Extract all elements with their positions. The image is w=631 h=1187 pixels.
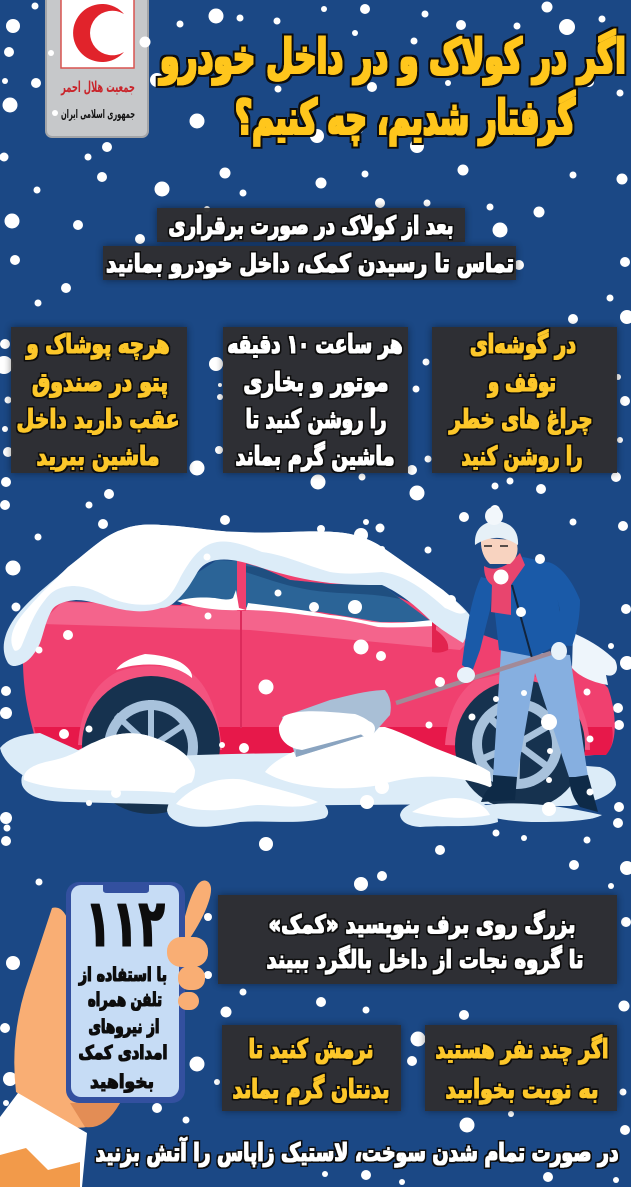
snow on window sill	[177, 590, 434, 627]
foreground snow over illustration	[36, 546, 594, 816]
panel: stay warm by stretching: بدنتان گرم بماند	[232, 1074, 390, 1105]
shirt cuff	[0, 1093, 87, 1187]
boots	[481, 775, 517, 802]
logo: Red Crescent	[46, 0, 150, 137]
logo text: red: جمعیت هلال احمر	[60, 78, 135, 96]
phone instructions: تلفن همراه	[88, 989, 162, 1011]
icon: red crescent	[73, 4, 124, 62]
rear wheel arch	[445, 670, 590, 750]
panel: blankets: پتو در صندوق	[32, 368, 168, 398]
hat	[475, 521, 518, 545]
person shoveling	[462, 507, 598, 812]
intro text block	[103, 208, 516, 280]
shovel	[279, 653, 551, 757]
panel: engine every ten minutes: هر ساعت ۱۰ دقیقه	[228, 330, 402, 360]
panel: hazard lights	[432, 327, 617, 473]
phone in hand illustration	[0, 881, 211, 1187]
panel: blankets: عقب دارید داخل	[16, 405, 180, 435]
panel: write help on snow	[218, 895, 617, 984]
door handle and mirror	[432, 622, 448, 653]
shirt sleeve	[0, 1148, 80, 1187]
phone instructions: با استفاده از	[78, 964, 167, 986]
logo text: black: جمهوری اسلامی ایران	[61, 107, 135, 122]
phone instructions: امدادی کمک	[78, 1042, 168, 1064]
rear wheel	[455, 680, 585, 810]
gloves	[457, 642, 567, 683]
panel: hazard lights: توقف و	[487, 368, 556, 398]
panel: engine every ten minutes: را روشن کنید تا	[246, 405, 386, 435]
upper finger	[184, 881, 211, 945]
panel: engine every ten minutes: موتور و بخاری	[244, 368, 388, 398]
jacket	[491, 557, 565, 657]
snow on roof	[4, 525, 471, 666]
panel: engine every ten minutes: ماشین گرم بماند	[236, 441, 394, 472]
panel: blankets: هرچه پوشاک و	[25, 330, 169, 360]
panel: stay warm by stretching: نرمش کنید تا	[248, 1035, 374, 1065]
phone	[66, 882, 185, 1103]
panel: engine every ten minutes	[223, 327, 408, 473]
emergency number: ۱۱۲	[85, 885, 165, 962]
scarf	[484, 553, 525, 615]
rear bumper snow	[572, 633, 617, 685]
face	[481, 538, 518, 564]
ground snow	[0, 733, 616, 806]
snow on wheel arch	[116, 654, 192, 678]
title	[159, 29, 626, 146]
fingers	[167, 937, 208, 1010]
snow mounds	[21, 733, 199, 805]
illustration: snow-covered car	[0, 507, 617, 827]
panel: blankets: ماشین ببرید	[36, 442, 160, 472]
panel: sleep in turns	[425, 1025, 617, 1111]
phone instructions: از نیروهای	[88, 1016, 160, 1038]
panel: hazard lights: در گوشه‌ای	[470, 329, 576, 360]
panel: blankets	[11, 327, 187, 473]
panel: hazard lights: را روشن کنید	[462, 442, 582, 472]
jeans	[493, 650, 588, 777]
front wheel	[82, 676, 220, 814]
intro text block: تماس تا رسیدن کمک، داخل خودرو بمانید	[106, 249, 514, 279]
intro text block: بعد از کولاک در صورت برقراری	[168, 211, 454, 241]
right ground patch	[470, 803, 602, 822]
front wheel arch	[78, 666, 222, 750]
phone instructions	[78, 964, 168, 1093]
car body	[23, 560, 615, 756]
panel: stay warm by stretching	[222, 1025, 401, 1111]
window	[177, 560, 432, 622]
palm	[14, 908, 120, 1128]
phone instructions: بخواهید	[90, 1071, 154, 1093]
